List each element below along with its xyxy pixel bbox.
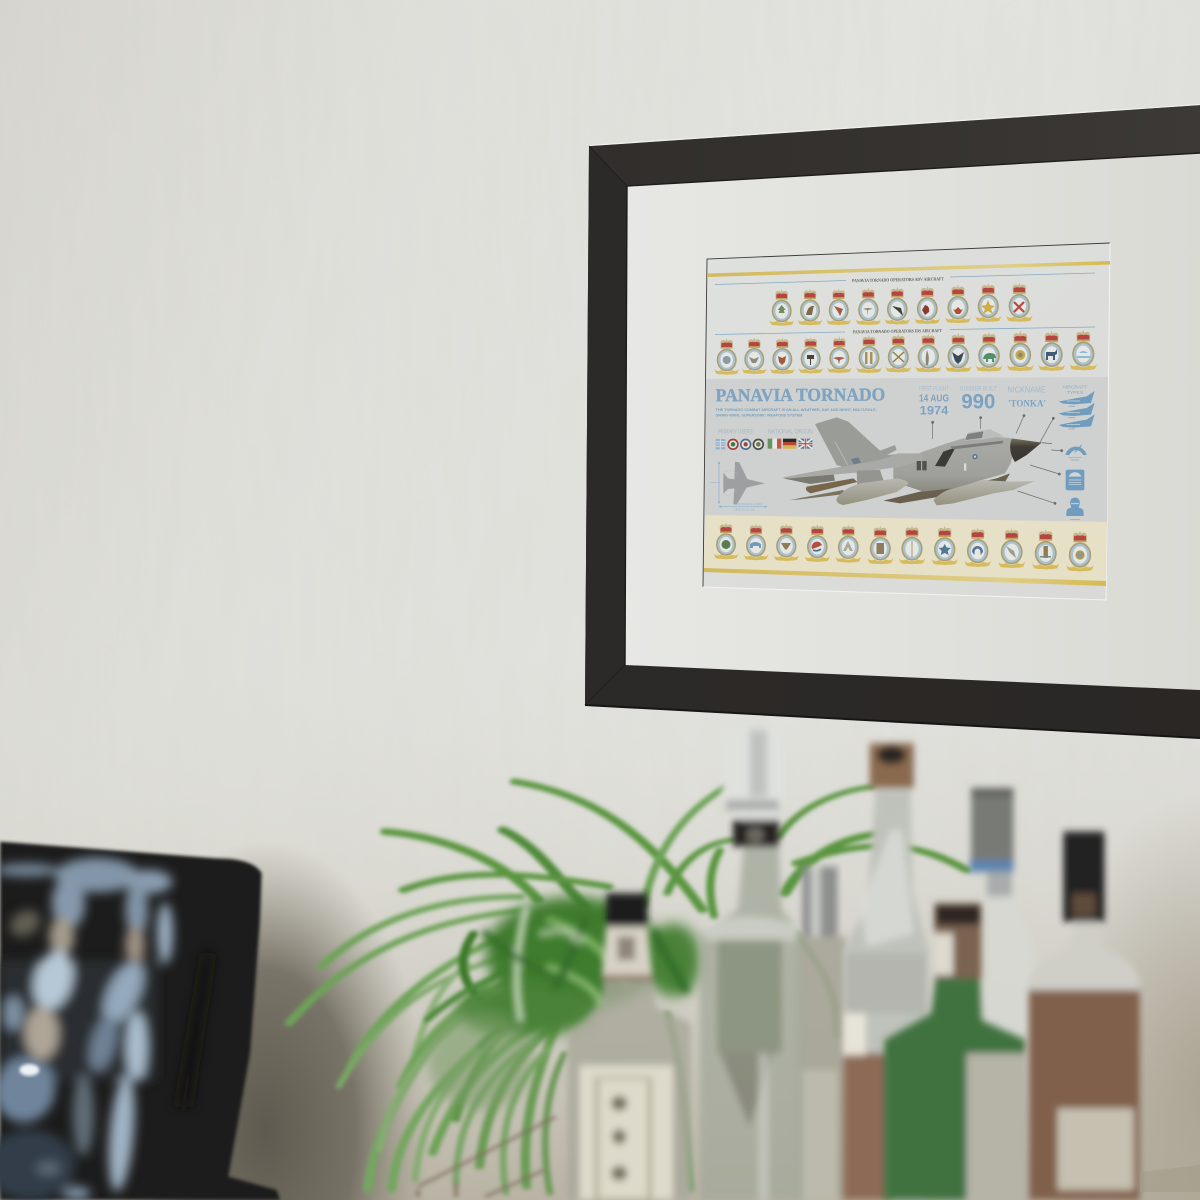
cream squadron panel [704,515,1107,581]
primary users legend [716,428,764,450]
nickname stat: NICKNAME [1007,384,1046,394]
pylon [857,470,884,487]
gin bottle label [579,1065,673,1200]
fuselage [893,437,1015,492]
plant and bottles [289,726,1140,1200]
engine vent [917,461,927,470]
plant foliage core [427,897,701,1110]
infographic print [703,243,1110,600]
icon: pilot [1066,498,1084,519]
heading: IDS operators: PANAVIA TORNADO OPERATORS IDS AIRCRAFT [853,328,942,334]
icon: speed gauge [1065,445,1087,460]
central panel content [710,384,1095,519]
number built stat: NUMBER BUILT [960,385,997,392]
fin flash [851,457,861,465]
national origin legend [768,428,813,449]
aircraft types icons: TYPES [1067,390,1084,396]
description [716,408,877,418]
title: PANAVIA TORNADO [716,384,885,405]
leather highlights [0,858,213,1200]
wire stand [418,1117,556,1197]
spider plant [289,782,967,1193]
description: SWING-WING, SUPERSONIC WEAPONS SYSTEM [716,414,802,418]
mat board [625,153,1200,690]
foliage mottling [485,907,685,1020]
first flight stat: FIRST FLIGHT [919,385,949,392]
nickname stat [1007,384,1046,409]
upper pods [783,473,835,484]
bottle: green [884,903,1025,1200]
belly [883,473,1010,503]
bottle: brown spirit [1028,832,1140,1200]
picture frame [585,104,1200,738]
first flight stat [919,385,949,417]
plan-view silhouette with dimensions: LENGTH 16.72M [734,508,755,512]
aircraft types icons: AIRCRAFT [1063,385,1087,391]
bottle: cork [843,743,928,1200]
top gold rule [708,261,1110,277]
national origin legend: NATIONAL ORIGIN [768,428,813,435]
roundel [972,454,978,459]
crest row: bottom squadrons [714,522,1094,572]
icon: engine panel [1066,470,1084,490]
pod [806,478,857,493]
plan-view silhouette with dimensions [710,461,768,512]
lower missile [790,490,845,500]
number built stat: 990 [961,388,995,413]
description: THE TORNADO COMBAT AIRCRAFT IS AN ALL-WEATHER, DAY AND NIGHT, MULTI-ROLE, [716,408,877,412]
tail fin [815,417,908,467]
crest row: IDS squadrons [714,330,1097,375]
chair [0,842,280,1200]
nose cone [1010,438,1042,462]
wing tank [836,478,908,505]
bottom gold rule [704,568,1106,586]
heading: ADV operators [715,273,1095,284]
bottle: tall clear [700,726,802,1200]
specular glint [19,1064,39,1076]
spine stripe [950,441,1003,449]
nickname stat: 'TONKA' [1008,399,1046,409]
bottle: grey cap [969,788,1037,1037]
centre tank [933,480,1035,505]
shelf edge [1140,1165,1200,1192]
plan-view silhouette with dimensions: WINGSPAN 13.91M [738,502,762,506]
primary users legend: PRIMARY USERS [718,428,753,435]
bottle: gin [568,893,691,1200]
crest row: ADV squadrons [769,282,1033,326]
aircraft types icons [1059,385,1095,429]
heading: ADV operators: PANAVIA TORNADO OPERATORS ADV AIRCRAFT [852,276,944,283]
intake [935,447,956,467]
first flight stat: 1974 [920,403,948,417]
bottle: small rear [796,867,846,1200]
main aircraft illustration [782,417,1052,505]
grey central panel [705,377,1108,522]
wing [782,453,923,478]
canopy [964,429,1004,441]
annotation pointers [932,415,1063,504]
first flight stat: 14 AUG [919,394,949,405]
